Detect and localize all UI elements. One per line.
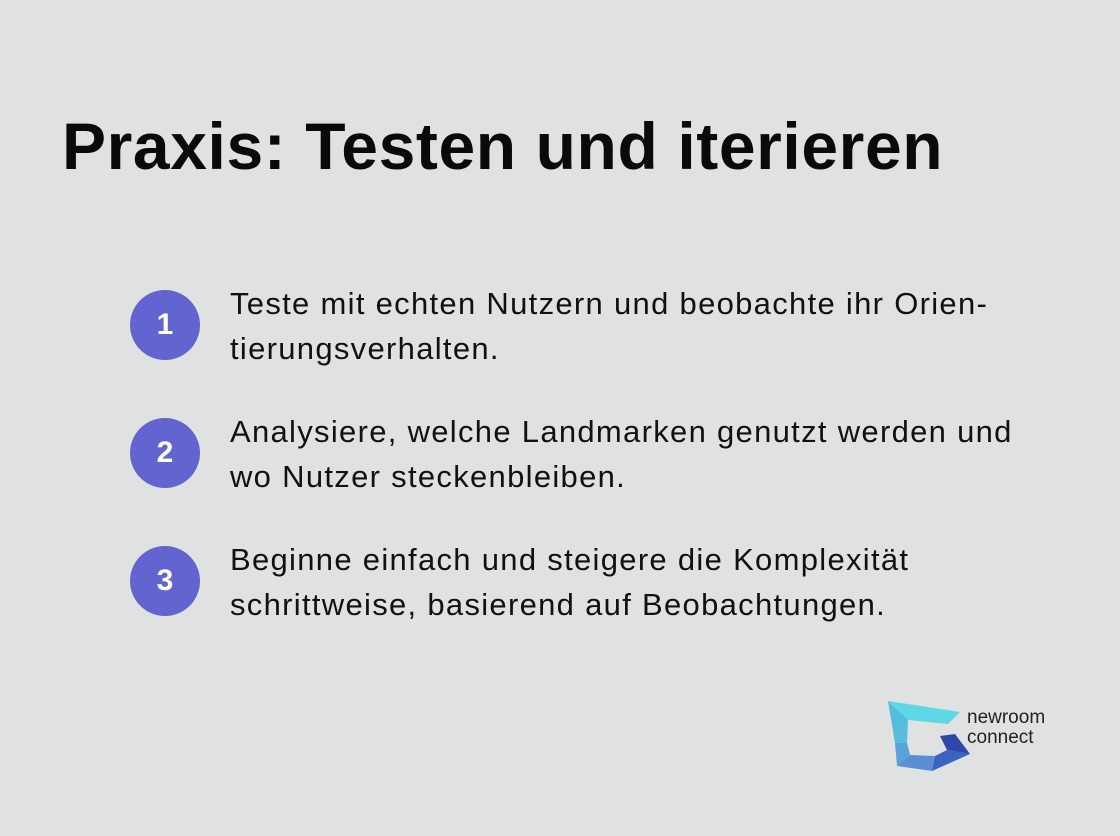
logo text: [967, 707, 1045, 748]
text 3: [230, 542, 909, 622]
badge 1: 1: [157, 308, 173, 341]
text 1: Teste mit echten Nutzern und beobachte ihr Orien-: [230, 286, 988, 321]
title: Praxis: Testen und iterieren: [62, 109, 943, 183]
logo icon: [888, 701, 970, 771]
badge 1: [130, 290, 200, 360]
badge 3: [130, 546, 200, 616]
step 2: [130, 414, 1013, 494]
step 3: [130, 542, 909, 622]
text 2: wo Nutzer steckenbleiben.: [230, 459, 626, 494]
text 1: tierungsverhalten.: [230, 331, 500, 366]
logo: [888, 701, 1045, 771]
text 2: Analysiere, welche Landmarken genutzt werden und: [230, 414, 1013, 449]
text 2: [230, 414, 1013, 494]
badge 3: 3: [157, 564, 173, 597]
text 3: schrittweise, basierend auf Beobachtungen.: [230, 587, 886, 622]
text 1: [230, 286, 988, 366]
logo text: connect: [967, 727, 1034, 748]
step 1: [130, 286, 988, 366]
text 3: Beginne einfach und steigere die Komplexität: [230, 542, 909, 577]
badge 2: 2: [157, 436, 173, 469]
logo text: newroom: [967, 707, 1045, 728]
badge 2: [130, 418, 200, 488]
